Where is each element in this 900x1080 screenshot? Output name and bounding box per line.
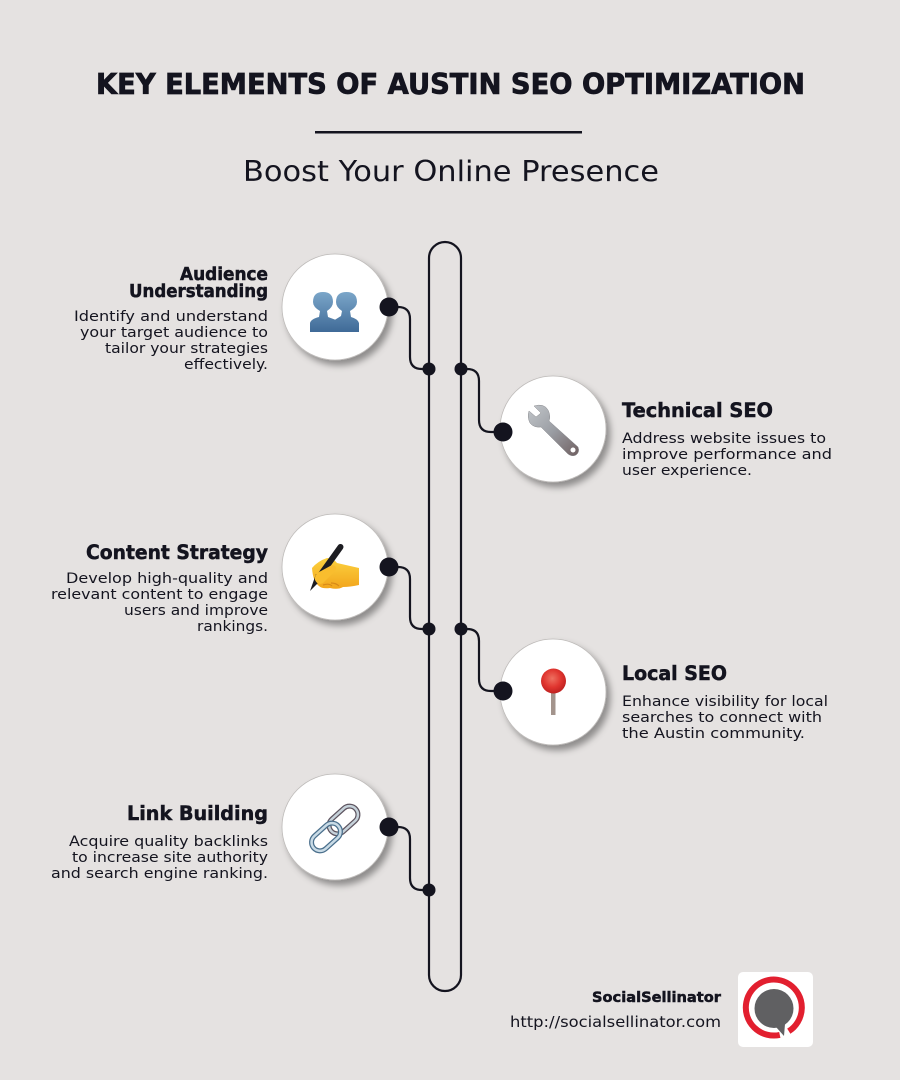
heading: Link Building xyxy=(127,802,268,825)
description: relevant content to engage xyxy=(51,587,268,603)
description: searches to connect with xyxy=(622,710,822,726)
heading: Understanding xyxy=(129,282,268,302)
panel: link building xyxy=(51,774,436,896)
connector xyxy=(461,369,503,432)
circle xyxy=(282,254,388,360)
icon: people xyxy=(310,292,359,332)
node xyxy=(380,818,398,836)
description: Identify and understand xyxy=(74,309,268,325)
logo xyxy=(738,972,813,1047)
title: KEY ELEMENTS OF AUSTIN SEO OPTIMIZATION xyxy=(96,68,805,101)
description: your target audience to xyxy=(80,325,268,341)
description xyxy=(74,309,268,373)
description: user experience. xyxy=(622,463,752,479)
connector xyxy=(389,567,429,629)
heading: Local SEO xyxy=(622,662,727,685)
description xyxy=(622,694,828,742)
description: tailor your strategies xyxy=(105,341,268,357)
brand url: http://socialsellinator.com xyxy=(510,1013,721,1031)
description: users and improve xyxy=(124,603,268,619)
panel: content strategy xyxy=(51,514,436,636)
trunk dot xyxy=(454,622,468,636)
heading xyxy=(129,265,268,302)
brand name: SocialSellinator xyxy=(592,990,722,1006)
description: to increase site authority xyxy=(72,850,268,866)
icon: writing hand xyxy=(310,547,359,591)
description: the Austin community. xyxy=(622,726,805,742)
description xyxy=(51,834,268,882)
trunk dot xyxy=(454,362,468,376)
description: effectively. xyxy=(184,357,268,373)
connector xyxy=(389,307,429,369)
description xyxy=(51,571,268,635)
heading: Content Strategy xyxy=(86,541,268,564)
circle xyxy=(282,514,388,620)
description: Develop high-quality and xyxy=(66,571,268,587)
description: Acquire quality backlinks xyxy=(69,834,268,850)
subtitle: Boost Your Online Presence xyxy=(243,155,659,188)
circle xyxy=(500,639,606,745)
description: improve performance and xyxy=(622,447,832,463)
panel: technical seo xyxy=(454,362,832,482)
heading: Audience xyxy=(180,265,268,285)
trunk dot xyxy=(422,884,436,896)
connector xyxy=(461,629,503,691)
description: Enhance visibility for local xyxy=(622,694,828,710)
panel: local seo xyxy=(454,622,828,745)
heading: Technical SEO xyxy=(622,399,773,422)
circle xyxy=(500,376,606,482)
icon: chain xyxy=(308,803,361,854)
description: and search engine ranking. xyxy=(51,866,268,882)
circle xyxy=(282,774,388,880)
timeline track xyxy=(429,242,461,991)
description: Address website issues to xyxy=(622,431,826,447)
node xyxy=(380,298,398,316)
panel: audience understanding xyxy=(74,254,436,376)
node xyxy=(494,682,512,700)
trunk dot xyxy=(422,362,436,376)
description: rankings. xyxy=(197,619,268,635)
connector xyxy=(389,827,429,890)
icon: map pin xyxy=(541,668,566,715)
node xyxy=(380,558,398,576)
node xyxy=(494,422,512,442)
description xyxy=(622,431,832,479)
icon: wrench xyxy=(528,405,579,456)
title rule xyxy=(315,131,582,134)
trunk dot xyxy=(422,622,436,636)
